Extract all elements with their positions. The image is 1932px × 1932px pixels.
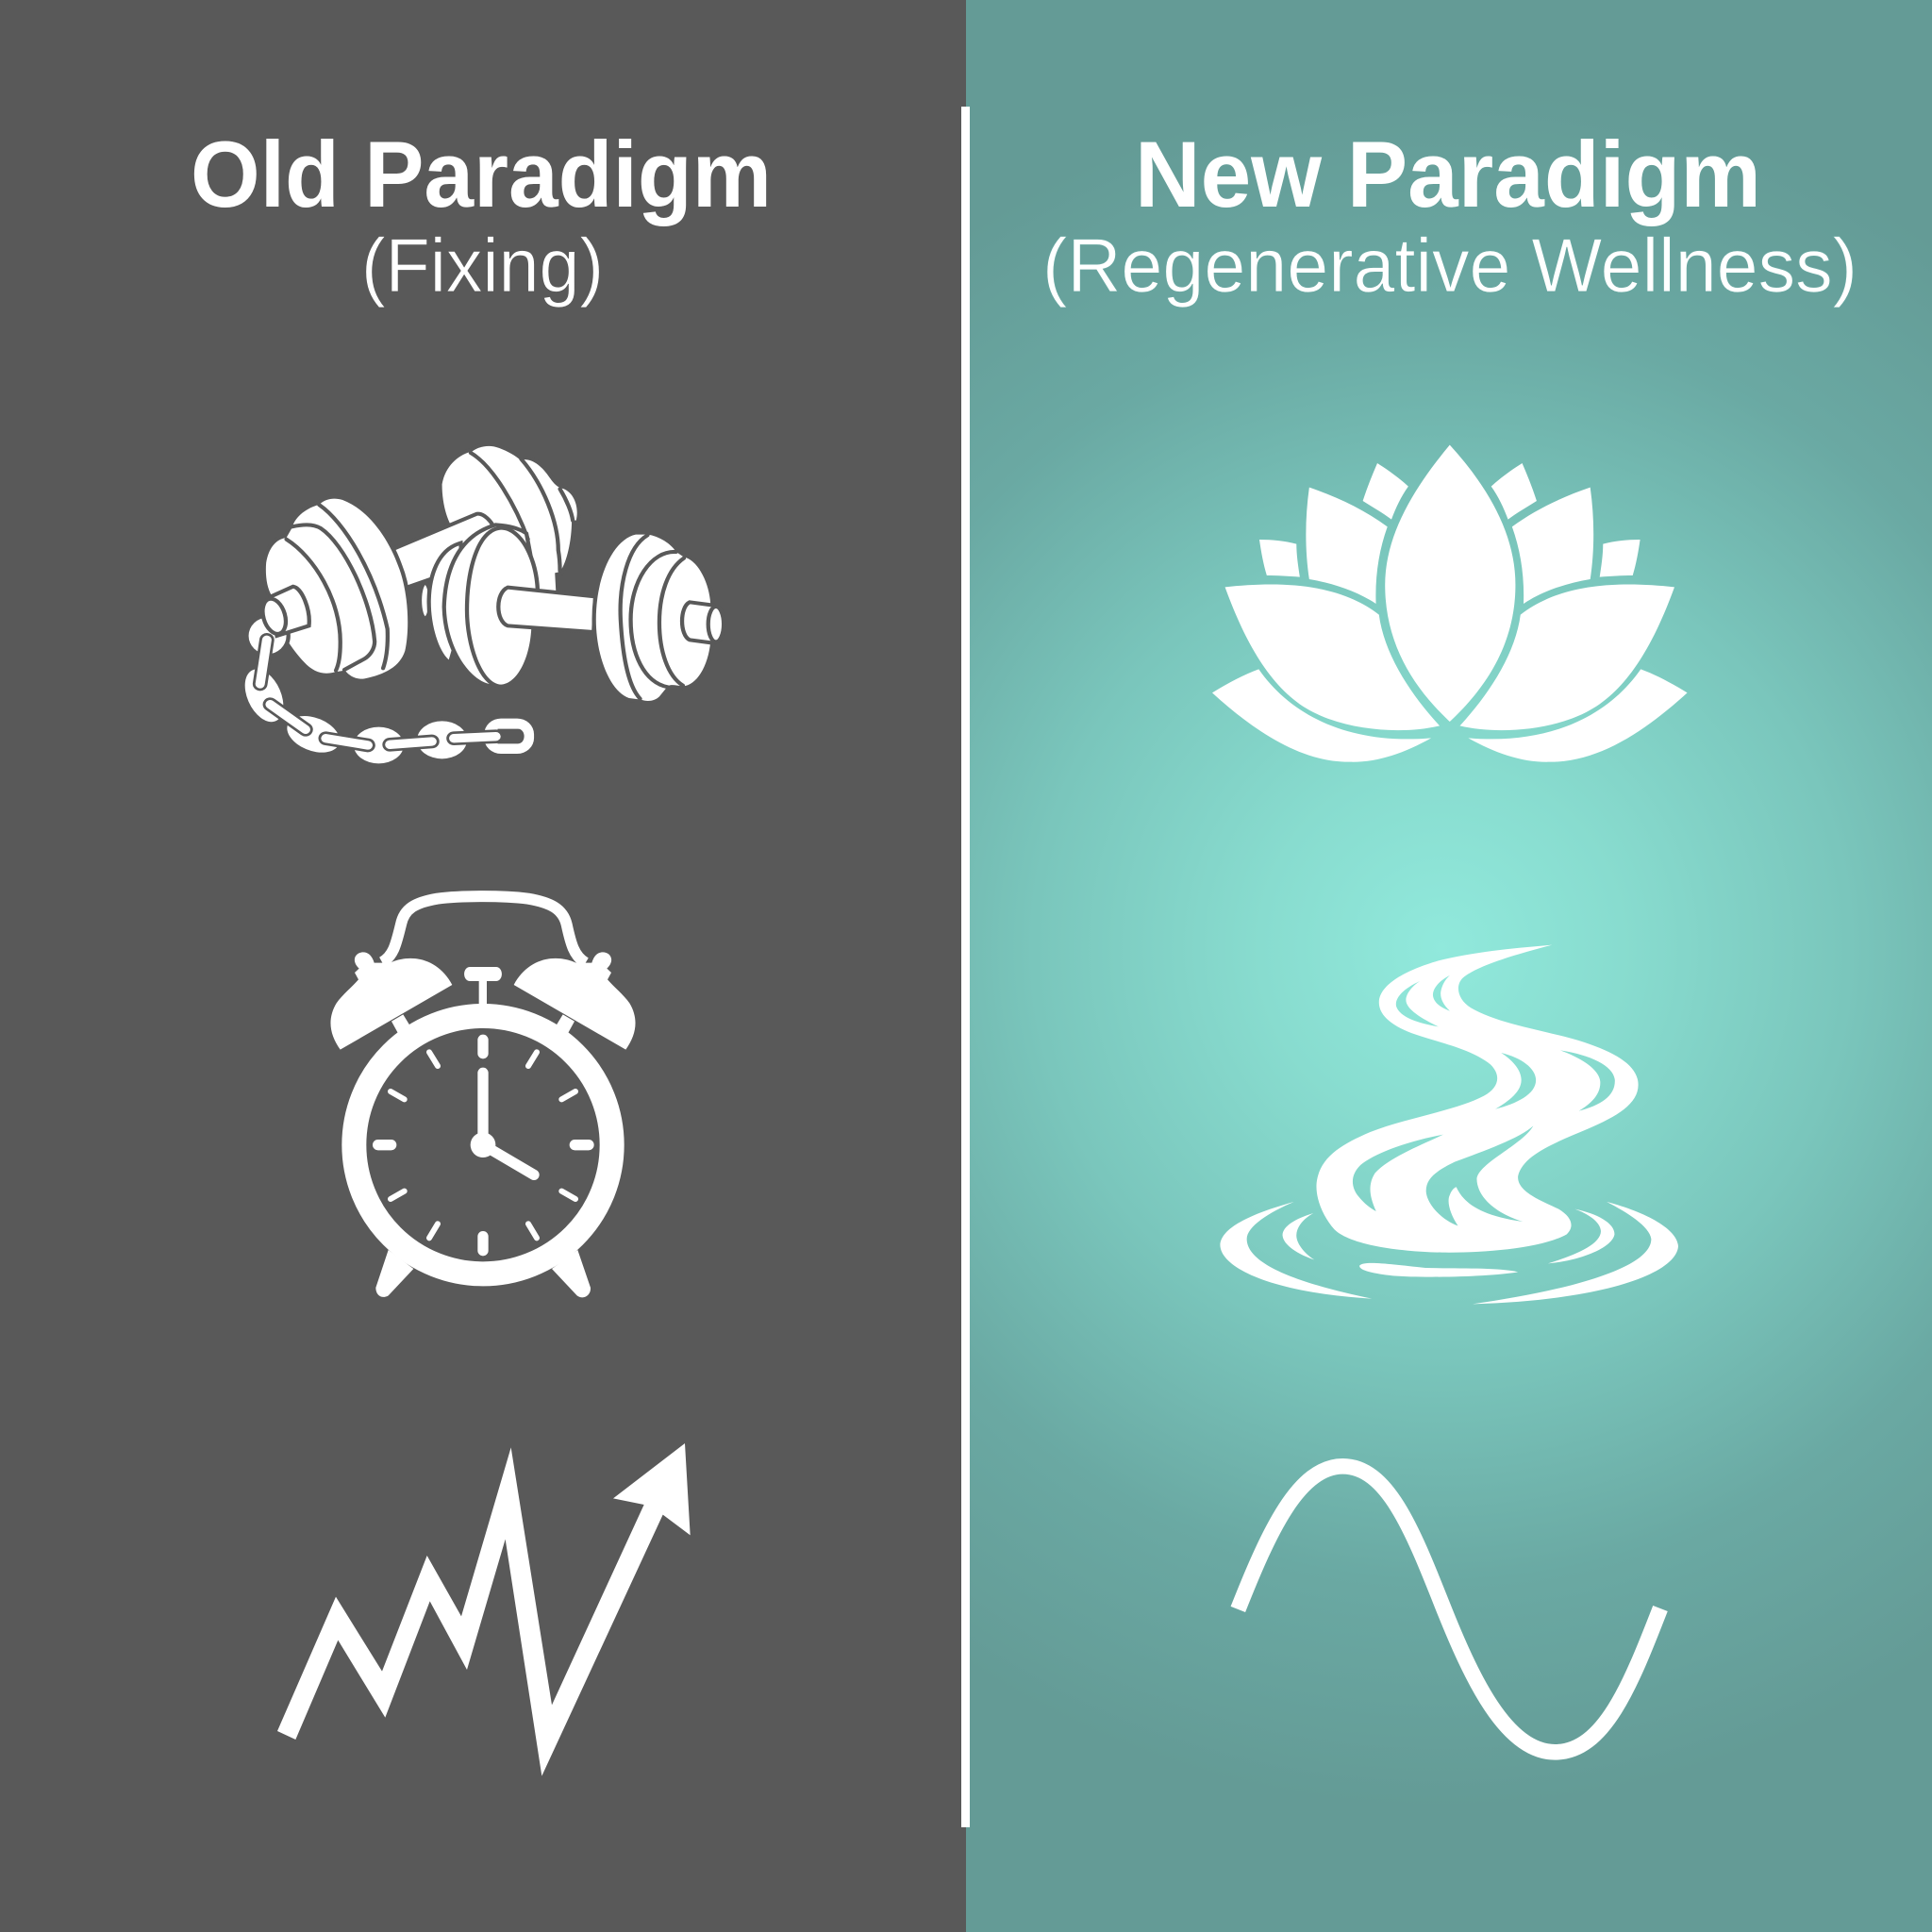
lotus left petals — [1212, 463, 1440, 762]
right weight stack — [596, 535, 724, 701]
left weight stack — [249, 499, 408, 679]
right bell — [514, 952, 636, 1050]
minor ticks — [391, 1052, 575, 1238]
clock hub — [471, 1132, 495, 1158]
icon: jagged rising arrow — [277, 1443, 691, 1776]
water ripples — [1220, 1202, 1678, 1304]
panel: old paradigm — [0, 0, 966, 1932]
clock hands — [483, 1073, 534, 1174]
middle weight stack — [420, 526, 536, 685]
heading: new paradigm: New Paradigm — [1135, 122, 1761, 226]
bell struts and feet — [375, 1014, 591, 1297]
clock ring — [354, 1016, 612, 1274]
major ticks — [378, 1040, 589, 1251]
icon: flowing water — [1220, 945, 1678, 1304]
lotus right petals — [1459, 463, 1688, 762]
panel: new paradigm — [966, 0, 1932, 1932]
lotus center petal — [1385, 445, 1515, 722]
clock knob — [464, 967, 502, 1005]
subheading: regenerative wellness: (Regenerative Wellness) — [1042, 224, 1857, 308]
back dumbbell — [395, 446, 577, 594]
left bell — [330, 952, 452, 1050]
icon: smooth sine wave — [1238, 1466, 1660, 1752]
front bar — [498, 588, 595, 632]
river stream — [1316, 945, 1639, 1253]
subheading: fixing: (Fixing) — [361, 224, 604, 308]
chain — [238, 640, 534, 763]
clock handle — [382, 896, 586, 963]
icon: alarm clock — [330, 896, 636, 1297]
icon: lotus — [1212, 445, 1688, 762]
center divider — [961, 107, 970, 1827]
chain first link — [249, 618, 287, 654]
icon: chained dumbbells — [238, 446, 724, 763]
heading: old paradigm: Old Paradigm — [191, 122, 772, 226]
